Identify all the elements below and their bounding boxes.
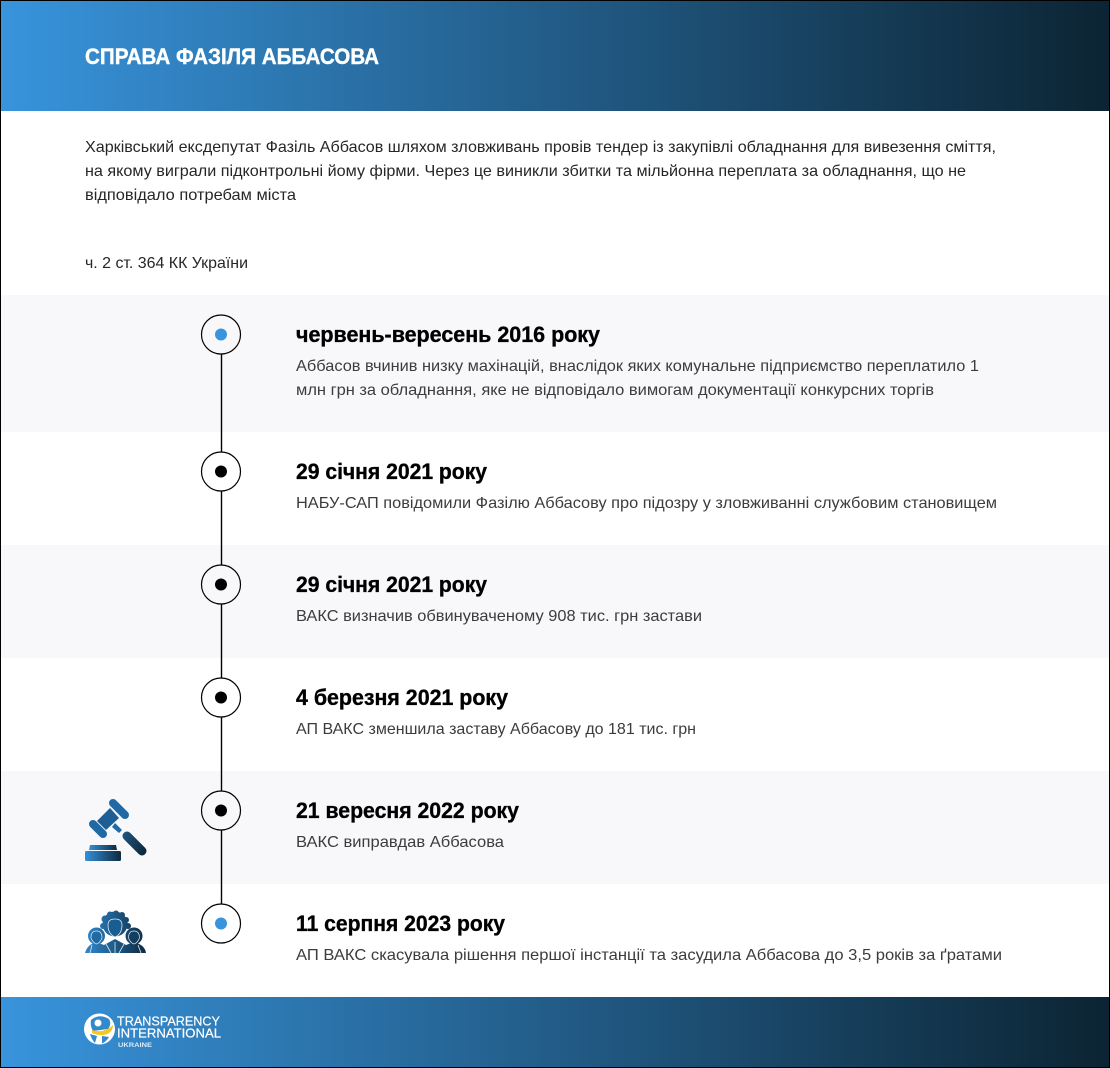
marker (202, 904, 240, 943)
legal article: ч. 2 ст. 364 КК України (85, 255, 248, 272)
date: червень-вересень 2016 року (296, 322, 601, 347)
date: 29 січня 2021 року (296, 459, 488, 484)
row backgrounds (0, 295, 1110, 884)
logo text: TRANSPARENCY (117, 1014, 220, 1028)
logo emblem (84, 1014, 115, 1044)
timeline line (220, 334, 222, 923)
event: 21 вересня 2022 (202, 791, 520, 851)
description: ВАКС виправдав Аббасова (296, 834, 504, 851)
marker (202, 565, 240, 604)
logo: Transparency International Ukraine (84, 1014, 221, 1049)
event: червень-вересень 2016 (202, 315, 979, 399)
event: 29 січня 2021, підозра (202, 452, 997, 512)
intro text (85, 139, 996, 204)
marker (202, 678, 240, 717)
logo text (117, 1014, 221, 1049)
footer band (0, 997, 1110, 1068)
date: 29 січня 2021 року (296, 572, 488, 597)
intro text: Харківський ексдепутат Фазіль Аббасов шляхом зловживань провів тендер із закупівлі обладнання для вивезення сміття, (85, 139, 996, 156)
logo text: UKRAINE (118, 1042, 153, 1049)
marker (202, 315, 240, 354)
description (296, 358, 979, 399)
icon: judge gavel (85, 803, 142, 861)
logo text: INTERNATIONAL (117, 1026, 221, 1040)
date: 21 вересня 2022 року (296, 798, 520, 823)
icon: group of jurors (85, 910, 146, 953)
description: млн грн за обладнання, яке не відповідало вимогам документації конкурсних торгів (296, 382, 934, 399)
event: 29 січня 2021, застава (202, 565, 702, 625)
intro text: відповідало потребам міста (85, 187, 296, 204)
description: АП ВАКС зменшила заставу Аббасову до 181 тис. грн (296, 721, 696, 738)
description: Аббасов вчинив низку махінацій, внаслідок яких комунальне підприємство переплатило 1 (296, 358, 979, 375)
description: АП ВАКС скасувала рішення першої інстанції та засудила Аббасова до 3,5 років за ґратами (296, 947, 1002, 964)
description: НАБУ-САП повідомили Фазілю Аббасову про підозру у зловживанні службовим становищем (296, 495, 997, 512)
marker (202, 791, 240, 830)
title: СПРАВА ФАЗІЛЯ АББАСОВА (85, 44, 379, 69)
description: ВАКС визначив обвинуваченому 908 тис. грн застави (296, 608, 702, 625)
event: 11 серпня 2023 (202, 904, 1002, 964)
intro text: на якому виграли підконтрольні йому фірми. Через це виникли збитки та мільйонна переплата за обладнання, що не (85, 163, 966, 180)
event: 4 березня 2021 (202, 678, 696, 738)
marker (202, 452, 240, 491)
date: 4 березня 2021 року (296, 685, 509, 710)
header band (0, 0, 1110, 111)
date: 11 серпня 2023 року (296, 911, 506, 936)
